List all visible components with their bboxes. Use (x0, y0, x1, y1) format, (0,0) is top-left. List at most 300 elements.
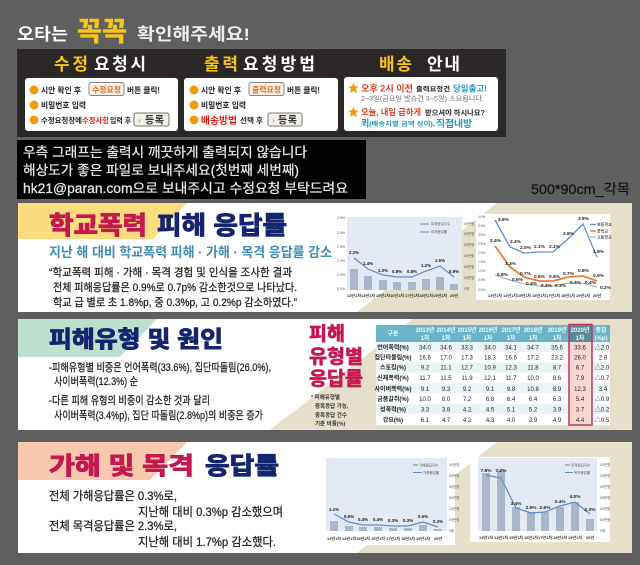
chart: perpetration rate: 0.3% (433, 519, 443, 524)
chart: perpetration rate: 0.3% (403, 518, 413, 523)
chart: rate by school level: 0.8% (497, 272, 509, 278)
footnote (311, 393, 349, 428)
heading: correction request (54, 55, 146, 74)
table: response rate by type: △0.7 (595, 374, 610, 382)
table: response rate by type: 9.2 (463, 387, 472, 393)
chart: rate by school level: 2.8% (563, 231, 575, 237)
body text: 학교 급 별로 초 1.8%p, 중 0.3%p, 고 0.2%p 감소하였다.” (53, 295, 297, 309)
table: response rate by type: 33.6 (574, 346, 586, 352)
chart: rate by school level: 2.0% (478, 251, 485, 255)
chart: victim rate bars and line: 20년 (450, 292, 458, 298)
chart: rate by school level: 0.8% (578, 268, 590, 274)
chart: witness rate: 2.6% (540, 505, 551, 511)
table: response rate by type: 5.1 (507, 408, 516, 414)
table: response rate by type: 8.7 (553, 366, 562, 372)
card: correction steps: 입력 후 (110, 115, 131, 125)
subheading: 지난 해 대비 학교폭력 피해 · 가해 · 목격 응답률 감소 (49, 245, 332, 260)
table: response rate by type: 4.2 (463, 418, 472, 424)
table: response rate by type: 10.9 (484, 366, 496, 372)
card: print steps: › (272, 116, 275, 125)
footnote: * 피해유형별 (311, 393, 340, 401)
chart: perpetration rate: 0.4% (358, 517, 368, 522)
chart: victim rate bars and line: 2.0% (337, 231, 345, 235)
heading (49, 212, 287, 240)
chart: rate by school level: 3.5% (478, 224, 485, 228)
chart: witness rate: 13년1차 (479, 534, 493, 540)
chart: witness rate: 00만명 (600, 517, 610, 522)
table: response rate by type: 2019년 (548, 326, 566, 334)
body text: “학교폭력 피해 · 가해 · 목격 경험 및 인식을 조사한 결과 (49, 265, 292, 279)
chart: rate by school level: 2.1% (534, 244, 546, 250)
table: response rate by type: 17.3 (461, 356, 473, 362)
chart: perpetration rate: 00만명 (449, 517, 459, 522)
heading: correction request: 요청시 (94, 55, 146, 74)
table: response rate by type: 12.3 (505, 366, 517, 372)
table: response rate by type: 1차 (463, 334, 472, 342)
body text: 지난해 대비 0.3%p 감소했으며 (138, 505, 283, 519)
chart: victim rate bars and line: 16년1차 (390, 292, 404, 298)
chart: perpetration rate: 0.6% (344, 514, 354, 519)
card: print steps: 시안 확인 후 (201, 85, 242, 95)
chart: victim rate bars and line: 2.2% (349, 250, 359, 255)
table: response rate by type: 11.7 (505, 376, 517, 382)
table: response rate by type: 6.3 (553, 397, 562, 403)
chart: victim rate bars and line: 00만명 (464, 264, 474, 269)
table: response rate by type: 7.2 (463, 397, 472, 403)
chart: perpetration rate: 14년1차 (342, 535, 356, 541)
table: response rate by type: 1차 (576, 334, 585, 342)
chart: witness rate: 20년 (586, 534, 594, 540)
chart: perpetration rate: 19년1차 (416, 535, 430, 541)
title: 확인해주세요! (137, 25, 250, 44)
size label: 500*90cm_각목 (531, 181, 630, 197)
chart: witness rate: 7.6% (481, 468, 492, 474)
chart: rate by school level: 0.4% (585, 280, 597, 286)
chart: rate by school level: 0.7% (563, 271, 575, 277)
table: response rate by type: 6.8 (486, 397, 495, 403)
chart: rate by school level: 18년1차 (561, 292, 575, 298)
table: response rate by type: 8.0 (442, 397, 451, 403)
chart: victim rate bars and line: 14년1차 (361, 292, 375, 298)
heading: 학교폭력 (49, 212, 147, 240)
chart: witness rate: 15년1차 (509, 534, 523, 540)
card: correction steps: 수정요청창에 (41, 115, 82, 125)
card: delivery info: 당일출고! (453, 84, 487, 94)
chart: rate by school level: 0.0% (478, 288, 485, 292)
chart: rate by school level: 2.4% (510, 239, 522, 245)
title: 꼭꼭 (77, 17, 127, 47)
table: response rate by type: △2.0 (595, 344, 610, 352)
chart: victim rate bars and line: 17년1차 (405, 292, 419, 298)
table: response rate by type: 2.8 (599, 356, 608, 362)
table: response rate by type: 강요(%) (383, 416, 403, 424)
chart: witness rate: 0명 (600, 528, 605, 533)
chart: perpetration rate: 0.4% (373, 517, 383, 522)
chart: victim rate bars and line: 0.0% (337, 287, 345, 291)
chart: rate by school level: 0.5% (512, 277, 524, 283)
chart: victim rate bars and line: 1.5% (337, 245, 345, 249)
side heading: 유형별 (309, 346, 363, 368)
chart: victim rate bars and line: 0.5% (337, 273, 345, 277)
heading (49, 453, 279, 480)
chart: victim rate bars and line: 1.2% (421, 263, 431, 268)
chart: perpetration rate: 15년1차 (356, 535, 370, 541)
table: response rate by type: 금품갈취(%) (377, 395, 409, 403)
chart: rate by school level: 2.0% (520, 245, 532, 251)
chart: rate by school level: 0.2% (600, 285, 612, 291)
panel: perpetration and witness rate (18, 442, 632, 553)
chart: rate by school level: 0.5% (534, 274, 546, 280)
card: delivery info: 퀵 (361, 118, 369, 128)
table: response rate by type: 사이버폭력(%) (375, 385, 411, 393)
table: response rate by type: 16.6 (419, 356, 431, 362)
heading: print request: 출력 (204, 55, 238, 74)
chart: rate by school level: 2.1% (549, 244, 561, 250)
table: response rate by type: 1차 (553, 334, 562, 342)
card: correction steps: › (138, 116, 141, 125)
table: response rate by type: 6.1 (421, 418, 430, 424)
table: response rate by type (375, 324, 610, 425)
chart: perpetration rate: 가해응답자수 (419, 462, 439, 468)
card: correction steps: 시안 확인 후 (41, 85, 82, 95)
card: delivery info: 출력요청건 (416, 84, 450, 93)
chart: victim rate bars and line: 19년1차 (433, 292, 447, 298)
table: response rate by type: 2016년 (479, 326, 497, 334)
chart: victim rate bars and line: 00만명 (464, 231, 474, 236)
notice: black box: 해상도가 좋은 파일로 보내주세요(첫번째 세번째) (23, 163, 299, 178)
table: response rate by type: 18.3 (484, 356, 496, 362)
table: response rate by type: 23.2 (551, 356, 563, 362)
table: response rate by type: 9.1 (421, 387, 430, 393)
chart: witness rate: 2.3% (585, 507, 596, 513)
side heading: 응답률 (309, 368, 363, 390)
chart: rate by school level: 13년1차 (488, 292, 502, 298)
chart: witness rate: 4.0% (570, 494, 581, 500)
side heading (309, 323, 363, 390)
card: print steps (184, 78, 338, 131)
table: response rate by type: 1차 (507, 334, 516, 342)
panel: victim types and causes (18, 319, 632, 430)
chart: victim rate bars and line: 2.5% (337, 216, 345, 220)
table: response rate by type: 2017년 (502, 326, 520, 334)
body text: -피해유형별 비중은 언어폭력(33.6%), 집단따돌림(26.0%), (49, 360, 271, 374)
chart: victim rate bars and line: 00만명 (464, 221, 474, 226)
chart: perpetration rate: 16년1차 (371, 535, 385, 541)
chart: rate by school level: 0.3% (541, 283, 553, 289)
table: response rate by type: 11.7 (419, 376, 431, 382)
table: response rate by type: 5.4 (576, 397, 585, 403)
chart: rate by school level: 0.5% (593, 273, 605, 279)
table: response rate by type: 2020년 (571, 326, 589, 334)
table: response rate by type: 11.1 (440, 366, 452, 372)
table: response rate by type: 17.2 (527, 356, 539, 362)
chart: perpetration rate: 00만명 (449, 495, 459, 500)
table: response rate by type: 1차 (421, 334, 430, 342)
chart: victim rate bars and line: 0명 (464, 286, 469, 291)
card: correction steps (25, 78, 178, 131)
table: response rate by type: 3.7 (576, 408, 585, 414)
chart: rate by school level: 0.4% (526, 281, 538, 287)
card: delivery info: 받으셔야 하시나요? (425, 108, 485, 117)
chart: victim rate bars and line: 00만명 (464, 242, 474, 247)
chart: witness rate: 00만명 (600, 473, 610, 478)
table: response rate by type: △0.2 (595, 406, 610, 414)
chart: rate by school level: 초등학교 (597, 221, 612, 227)
table: response rate by type: 스토킹(%) (380, 364, 406, 372)
chart: rate by school level: 0.3% (555, 283, 567, 289)
chart: perpetration rate: 13년1차 (327, 535, 341, 541)
table: response rate by type: 9.2 (421, 366, 430, 372)
table: response rate by type: 8.9 (553, 387, 562, 393)
chart: witness rate: 19년1차 (568, 534, 582, 540)
card: print steps: 선택 후 (240, 115, 263, 125)
table: response rate by type: 2018년 (524, 326, 542, 334)
chart: victim rate bars and line: 18년1차 (419, 292, 433, 298)
notice: black box (17, 140, 366, 199)
table: response rate by type: 증감 (595, 326, 607, 334)
chart: witness rate: 3.4% (555, 499, 566, 505)
table: response rate by type: 11.5 (440, 376, 452, 382)
heading: 피해 응답률 (157, 212, 287, 240)
heading: 가해 및 목격 (49, 453, 194, 480)
notice: black box: 우측 그래프는 출력시 깨끗하게 출력되지 않습니다 (23, 145, 308, 160)
card: correction steps: 수정사항 (82, 115, 109, 125)
table: response rate by type: 성폭력(%) (380, 406, 406, 414)
card: delivery info: 직접내방 (436, 118, 472, 130)
heading: delivery info: 배송 (379, 55, 412, 74)
table: response rate by type: 10.8 (527, 387, 539, 393)
table: response rate by type: 4.3 (486, 418, 495, 424)
heading: delivery info (379, 55, 460, 74)
chart: rate by school level (476, 214, 612, 300)
chart: perpetration rate: 00만명 (449, 484, 459, 489)
table: response rate by type: 4.9 (553, 418, 562, 424)
chart: perpetration rate (318, 455, 459, 545)
table: response rate by type: 9.1 (486, 387, 495, 393)
chart: victim rate bars and line (337, 216, 474, 298)
chart: rate by school level: 14년1차 (503, 292, 517, 298)
table: response rate by type: 9.8 (507, 387, 516, 393)
chart: perpetration rate: 0.3% (388, 518, 398, 523)
chart: rate by school level: 0.7% (520, 271, 532, 277)
chart: rate by school level: 0.5% (549, 274, 561, 280)
chart: witness rate: 00만명 (600, 506, 610, 511)
body text (49, 360, 271, 422)
table: response rate by type: 6.4 (507, 397, 516, 403)
chart: perpetration rate: 00만명 (449, 462, 459, 467)
table: response rate by type: 4.2 (463, 408, 472, 414)
heading: print request (204, 55, 315, 74)
chart: perpetration rate: 00만명 (449, 506, 459, 511)
chart: perpetration rate: 20년 (434, 535, 442, 541)
chart: rate by school level: 1.3% (505, 261, 517, 267)
title (17, 17, 250, 47)
table: response rate by type: 2015년 (458, 326, 476, 334)
panel: school violence response rate (18, 203, 632, 312)
footnote: 중복응답 가능, (315, 402, 349, 410)
card: correction steps: 버튼 클릭! (127, 85, 160, 95)
chart: rate by school level: 2.4% (490, 238, 502, 244)
chart: victim rate bars and line: 피해응답자수 (431, 221, 451, 226)
chart: victim rate bars and line: 00만명 (464, 253, 474, 258)
chart: witness rate: 17년1차 (538, 534, 552, 540)
chart: victim rate bars and line: 0.9% (449, 269, 459, 274)
table: response rate by type: 3.4 (599, 387, 608, 393)
table: response rate by type: 신체폭력(%) (377, 374, 409, 382)
card: correction steps: 수정요청 (92, 84, 121, 94)
table: response rate by type: 2014년 (437, 326, 455, 334)
chart: rate by school level: 17년1차 (546, 292, 560, 298)
chart: witness rate: 목격응답자수 (571, 462, 591, 468)
table: response rate by type: 34.6 (440, 346, 452, 352)
card: delivery info: 2~3일(금요일 발송건 3~5일) 소요됩니다. (361, 94, 484, 102)
chart: rate by school level: 3.0% (478, 233, 485, 237)
card: correction steps: 비밀번호 입력 (41, 100, 86, 110)
table: response rate by type: 4.5 (486, 408, 495, 414)
table: response rate by type: 34.7 (527, 346, 539, 352)
heading: 응답률 (205, 453, 279, 480)
chart: rate by school level: 0.5% (478, 278, 485, 282)
table: response rate by type: 6.4 (529, 397, 538, 403)
side heading: 피해 (309, 323, 345, 345)
table: response rate by type: 11.9 (461, 376, 473, 382)
panel: order guide (17, 49, 506, 137)
table: response rate by type: 1차 (442, 334, 451, 342)
chart: perpetration rate: 00만명 (449, 473, 459, 478)
card: correction steps: 등록 (145, 114, 164, 126)
table: response rate by type: 34.0 (419, 346, 431, 352)
table: response rate by type: 11.8 (527, 366, 539, 372)
chart: rate by school level: 3.8% (578, 216, 590, 222)
chart: rate by school level: 0.4% (570, 280, 582, 286)
table: response rate by type: 12.7 (461, 366, 473, 372)
body text: 지난해 대비 1.7%p 감소했다. (138, 535, 276, 549)
chart: witness rate: 7.2% (496, 468, 507, 474)
chart: rate by school level: 중학교 (597, 228, 608, 234)
table: response rate by type: 34.1 (505, 346, 517, 352)
chart: perpetration rate: 18년1차 (401, 535, 415, 541)
chart: witness rate: 3.4% (511, 501, 522, 507)
card: print steps: 출력요청 (252, 84, 281, 94)
chart: rate by school level: 19년1차 (576, 292, 590, 298)
chart: rate by school level: 2.5% (478, 242, 485, 246)
card: print steps: 비밀번호 입력 (201, 100, 246, 110)
heading: print request: 요청방법 (243, 55, 315, 74)
card: delivery info (344, 77, 498, 131)
body text: 사이버폭력(12.3%) 순 (54, 375, 138, 388)
chart: rate by school level: 4.0% (478, 215, 485, 219)
table: response rate by type: △0.9 (595, 395, 610, 403)
table: response rate by type: 4.7 (442, 418, 451, 424)
footnote: 중복응답 건수 (315, 411, 347, 419)
table: response rate by type: 34.0 (484, 346, 496, 352)
table: response rate by type: 2013년 (416, 326, 434, 334)
chart: witness rate: 00만명 (600, 495, 610, 500)
card: print steps: 배송방법 (201, 114, 237, 127)
body text: -다른 피해 유형의 비중이 감소한 것과 달리 (49, 393, 210, 407)
table: response rate by type: 5.2 (529, 408, 538, 414)
table: response rate by type: 4.4 (576, 418, 585, 424)
table: response rate by type: 10.0 (419, 397, 431, 403)
table: response rate by type: 1차 (529, 334, 538, 342)
card: delivery info: 오늘, 내일 급하게 (361, 107, 421, 117)
table: response rate by type: 26.0 (574, 356, 586, 362)
table: response rate by type: △0.5 (595, 416, 610, 424)
body text: 전체 피해응답률은 0.9%로 0.7p% 감소한것으로 나타났다. (53, 280, 297, 294)
chart: victim rate bars and line: 피해응답률 (431, 229, 448, 234)
heading: delivery info: 안내 (427, 55, 460, 74)
table: response rate by type: 구분 (387, 330, 399, 338)
table: response rate by type: 10.0 (527, 376, 539, 382)
chart: victim rate bars and line: 1.0% (378, 268, 388, 273)
table: response rate by type: 3.9 (529, 418, 538, 424)
chart: victim rate bars and line: 15년1차 (376, 292, 390, 298)
body text (49, 265, 297, 309)
chart: perpetration rate: 17년1차 (386, 535, 400, 541)
table: response rate by type: 35.6 (551, 346, 563, 352)
table: response rate by type: 1차 (484, 334, 493, 342)
footnote: 기준 비율(%) (315, 420, 345, 428)
chart: victim rate bars and line: 1.6% (435, 258, 445, 263)
table: response rate by type: (%p) (594, 336, 608, 342)
chart: rate by school level: 3.8% (498, 217, 510, 223)
chart: rate by school level: 20년 (593, 292, 601, 298)
chart: witness rate: 16년1차 (524, 534, 538, 540)
body text (49, 489, 283, 549)
chart: victim rate bars and line: 00만명 (464, 275, 474, 280)
card: delivery info: 오후 2시 이전 (361, 82, 413, 94)
table: response rate by type: 33.3 (461, 346, 473, 352)
chart: rate by school level: 고등학교 (597, 234, 612, 240)
card: print steps: 등록 (278, 114, 297, 126)
table: response rate by type: 언어폭력(%) (377, 344, 409, 352)
body text: 전체 가해응답률은 0.3%로, (49, 489, 177, 503)
chart: perpetration rate: 가해응답률 (423, 470, 440, 475)
table: response rate by type: △2.0 (595, 364, 610, 372)
chart: rate by school level: 1.8% (593, 249, 605, 255)
table: response rate by type: 17.0 (440, 356, 452, 362)
card: delivery info: (배송지별 금액 상이), (369, 120, 435, 128)
notice: black box: hk21@paran.com으로 보내주시고 수정요청 부탁드려요 (23, 181, 348, 196)
chart: victim rate bars and line: 0.8% (392, 269, 402, 274)
chart: perpetration rate: 0명 (449, 528, 454, 533)
body text: 사이버폭력(3.4%p), 집단 따돌림(2.8%p)의 비중은 증가 (54, 409, 263, 422)
card: print steps: 버튼 클릭! (287, 85, 320, 95)
table: response rate by type: 12.3 (574, 387, 586, 393)
table: response rate by type: 집단따돌림(%) (375, 354, 411, 362)
table: response rate by type: 12.1 (484, 376, 496, 382)
chart: perpetration rate: 1.1% (329, 507, 339, 512)
heading: correction request: 수정 (54, 55, 88, 74)
chart: rate by school level: 15년1차 (517, 292, 531, 298)
chart: rate by school level: 16년1차 (532, 292, 546, 298)
title: 오타는 (17, 25, 68, 44)
table: response rate by type: 6.7 (576, 366, 585, 372)
chart: rate by school level: 1.0% (478, 269, 485, 273)
table: response rate by type: 9.3 (442, 387, 451, 393)
chart: witness rate: 14년1차 (494, 534, 508, 540)
chart: victim rate bars and line: 13년1차 (347, 292, 361, 298)
chart: witness rate: 목격응답률 (574, 470, 591, 475)
chart: perpetration rate: 0.6% (418, 514, 428, 519)
table: response rate by type: 8.6 (553, 376, 562, 382)
chart: victim rate bars and line: 1.0% (337, 259, 345, 263)
body text: 전체 목격응답률은 2.3%로, (49, 519, 177, 533)
chart: witness rate: 2.5% (526, 505, 537, 511)
heading: 피해유형 및 원인 (49, 326, 223, 352)
chart: rate by school level: 1.5% (478, 260, 485, 264)
table: response rate by type: 16.6 (505, 356, 517, 362)
